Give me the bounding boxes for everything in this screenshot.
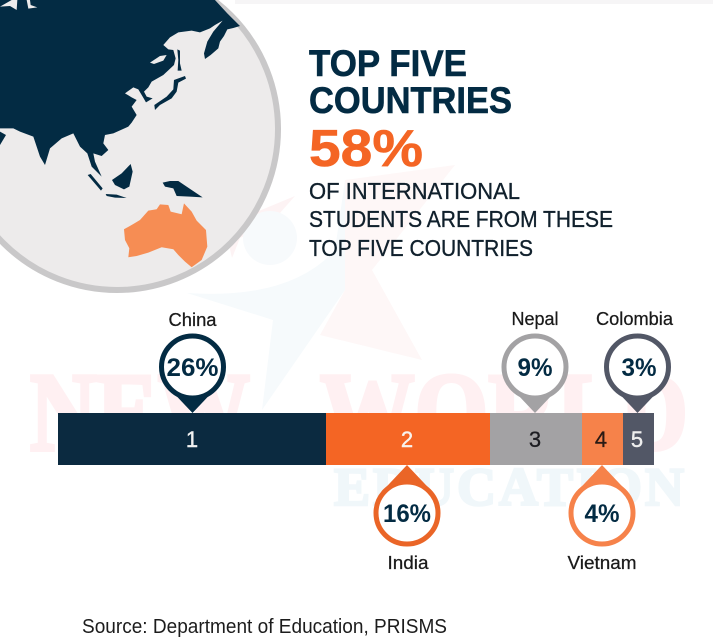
segment 5: 5 [631,427,643,452]
island: Java [106,194,127,198]
description text: OF INTERNATIONAL [309,178,520,204]
landmass: Australia [124,203,207,267]
island: Sri Lanka edge [0,132,6,145]
title [309,43,512,121]
pin: Vietnam 4%: 4% [584,500,620,528]
arctic cutouts [0,0,37,10]
watermark: New World Education: EDUCATION [334,457,684,517]
globe map [0,0,278,290]
island: Sakhalin [177,49,182,71]
segment 4 [582,413,623,465]
watermark: New World Education: NEW [30,351,250,475]
pin: China 26% [162,310,224,413]
pin: Colombia 3%: Colombia [596,309,674,329]
pin: China 26%: 26% [166,354,218,382]
segment 3: 3 [529,427,541,452]
title: COUNTRIES [309,80,512,121]
island: Borneo [112,164,133,189]
pin: Nepal 9% [504,309,566,413]
pin: India 16% [376,465,438,573]
segment 4: 4 [595,427,607,452]
segment 3 [490,413,582,465]
description text: STUDENTS ARE FROM THESE [309,206,613,232]
island: New Guinea [163,181,203,197]
segment 5 [623,413,654,465]
description text [309,178,613,261]
segment 1: 1 [186,427,198,452]
segment 1 [58,413,326,465]
title: TOP FIVE [309,43,467,84]
pin: Vietnam 4%: Vietnam [568,553,636,573]
inland sea cutout [150,55,167,64]
segment 2 [326,413,490,465]
segment 2: 2 [401,427,413,452]
pin: Colombia 3%: 3% [622,354,656,382]
pin: India 16%: India [388,553,430,573]
stacked bar [58,413,654,465]
pin: Nepal 9%: 9% [518,354,552,382]
pin: Nepal 9%: Nepal [512,309,558,329]
source note: Source: Department of Education, PRISMS [82,616,447,638]
watermark: New World Education [30,165,688,517]
island: Japan [154,76,186,110]
description text: TOP FIVE COUNTRIES [309,235,533,261]
landmass: Asia [0,0,240,177]
pin: Vietnam 4% [568,465,636,573]
headline stat: 58%: 58% [309,120,423,178]
globe disc [0,0,278,290]
pin: India 16%: 16% [383,500,431,528]
pin: Colombia 3% [596,309,674,413]
pin: China 26%: China [168,310,218,330]
island: Sumatra [88,174,103,191]
